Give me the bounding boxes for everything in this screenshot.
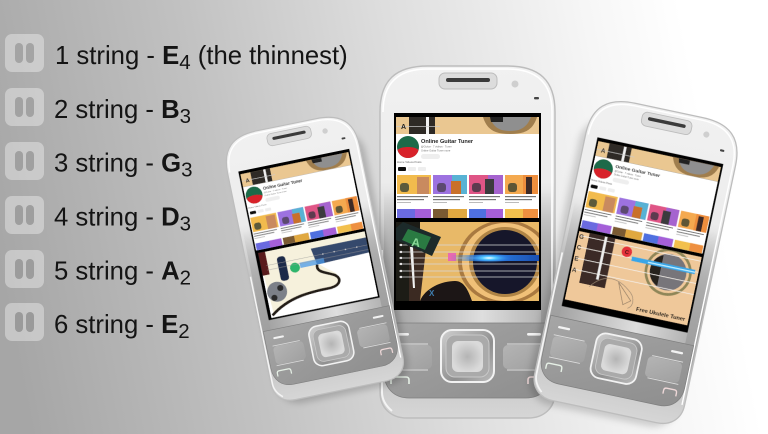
label: string 5: 2 xyxy=(180,266,191,290)
screen: center: Online Guitar Tuner xyxy=(421,139,474,145)
screen: left: A xyxy=(245,178,250,185)
label: string 4: 4 string - D xyxy=(54,204,180,232)
scene: ukulele xyxy=(565,229,702,325)
label: string 6: 2 xyxy=(178,320,190,343)
screen: right: Online Guitar Tuner xyxy=(615,164,661,179)
screen: left: Online Guitar Tuner more xyxy=(264,190,288,197)
screen: right: A xyxy=(600,147,607,155)
caption: Free Ukulele Tuner: Free Ukulele Tuner xyxy=(635,307,686,323)
phone: center, guitar tuner xyxy=(380,66,555,418)
icon: pause badge 4 xyxy=(5,196,44,234)
icon: pause badge 2 xyxy=(5,88,44,126)
scene: acoustic guitar tuner: X xyxy=(429,289,435,298)
icon: clip-on tuner: A xyxy=(411,235,421,250)
screen: left: @Guitar · 7 videos · Tuner xyxy=(264,187,288,194)
scene: bass guitar xyxy=(258,231,378,318)
screen: center: Home Videos Posts xyxy=(397,160,422,164)
icon: pause badge 3 xyxy=(5,142,44,180)
screen: right: Home Videos Posts xyxy=(591,179,613,186)
string list xyxy=(5,34,348,343)
screen: center xyxy=(394,113,552,310)
icon: pause badge 5 xyxy=(5,250,44,288)
label: string 3: 3 string - G xyxy=(54,150,181,178)
row: string 2 xyxy=(5,88,191,128)
phone: right, ukulele tuner xyxy=(524,93,744,433)
scene: ukulele: C xyxy=(576,244,582,252)
scene: acoustic guitar tuner xyxy=(396,222,539,301)
label: string 2: 2 string - B xyxy=(54,96,180,124)
label: string 3: 3 xyxy=(181,158,192,182)
label: string 4: 3 xyxy=(180,212,191,236)
icon: pause badge 1 xyxy=(5,34,44,72)
icon: pause badge 6 xyxy=(5,303,44,341)
screen: right xyxy=(562,137,723,333)
row: string 5 xyxy=(5,250,191,290)
label: string 1: 4 xyxy=(179,51,191,74)
phone: left, bass tuner xyxy=(220,110,412,408)
screen: center: A xyxy=(401,124,406,131)
row: string 3 xyxy=(5,142,192,182)
scene: ukulele: E xyxy=(574,255,579,263)
screen: center: Online Guitar Tuner more xyxy=(421,148,451,152)
screen: right: @Guitar · 7 videos · Tuner xyxy=(614,170,641,178)
label: string 2: 3 xyxy=(180,105,191,128)
label: string 5: 5 string - A xyxy=(54,258,180,286)
screen: center: @Guitar · 7 videos · Tuner xyxy=(421,144,452,148)
label: string 6: 6 string - E xyxy=(54,311,178,339)
screen: left: Home Videos Posts xyxy=(248,203,267,210)
scene: ukulele: G xyxy=(578,233,585,241)
row: string 1 xyxy=(5,34,348,74)
screen: left xyxy=(238,149,380,320)
row: string 6 xyxy=(5,303,190,343)
label: string 1: (the thinnest) xyxy=(191,42,348,70)
row: string 4 xyxy=(5,196,191,236)
screen: left: Online Guitar Tuner xyxy=(263,178,303,191)
scene: ukulele: A xyxy=(571,266,578,274)
scene: ukulele: C xyxy=(624,250,629,256)
screen: right: Online Guitar Tuner more xyxy=(613,173,640,182)
label: string 1: 1 string - E xyxy=(55,42,179,70)
icon: clip-on tuner xyxy=(396,222,441,256)
